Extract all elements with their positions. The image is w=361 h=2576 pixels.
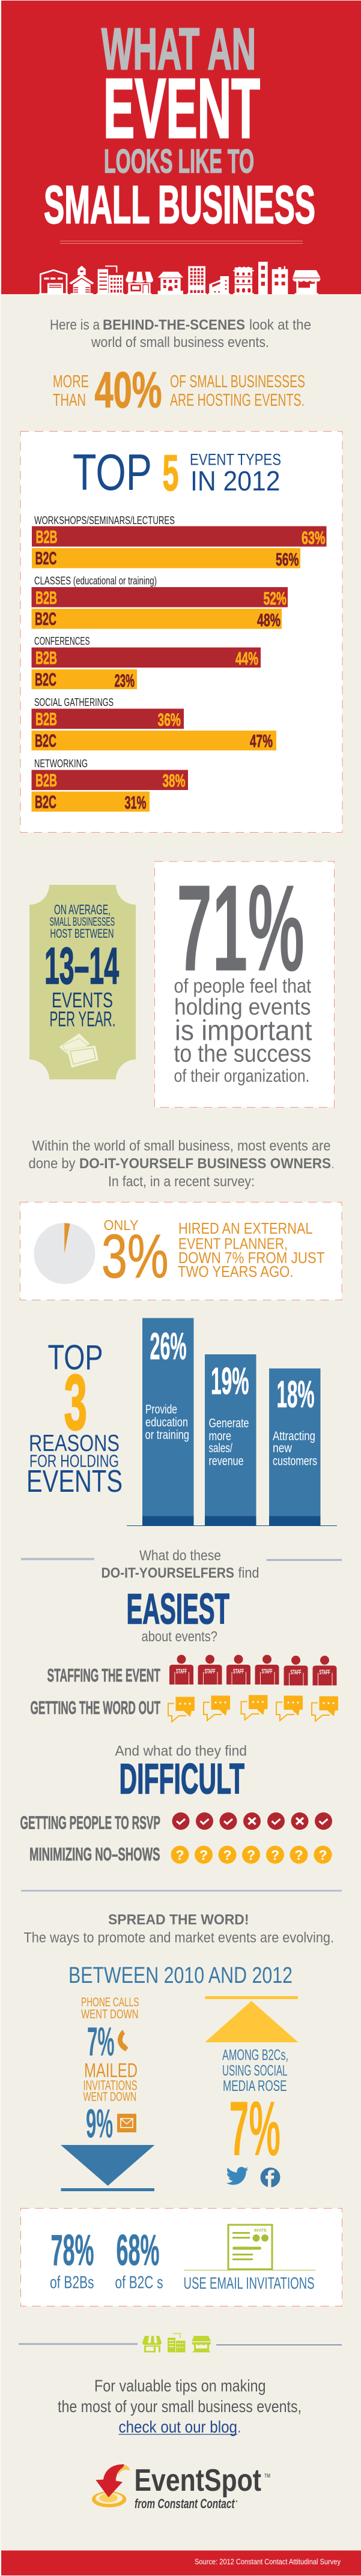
heading: what do they find difficult — [115, 1743, 247, 1803]
text block: do-it-yourself owners: done by — [29, 1156, 76, 1172]
logo: EventSpot: from Constant Contact — [135, 2496, 235, 2511]
bar group: networking: 31% — [125, 793, 147, 813]
column: phone and mail down: PHONE CALLS — [81, 1995, 139, 2009]
stat: more than 40%: 40% — [95, 361, 162, 418]
icon: schoolhouse — [69, 266, 94, 295]
bar: 26%: 26% — [150, 1326, 186, 1368]
panel: ticket, events per year: EVENTS — [52, 989, 113, 1012]
bar group: conferences: 44% — [235, 649, 258, 669]
panel: email invitations: 78% — [50, 2227, 94, 2275]
icon: staff person 3: STAFF — [233, 1668, 244, 1675]
icon: green office — [168, 2333, 185, 2352]
bar group: workshops: 56% — [276, 550, 299, 570]
text block: do-it-yourself owners: In fact, in a recent survey: — [108, 1174, 255, 1190]
column: phone and mail down: WENT DOWN — [81, 2007, 138, 2021]
arrow: down — [61, 2145, 155, 2191]
panel: only 3%: ONLY — [103, 1217, 138, 1234]
text block: do-it-yourself owners: Within the world of small business, most events are — [32, 1138, 330, 1154]
heading: top 3 reasons — [26, 1338, 123, 1499]
header banner — [1, 1, 361, 295]
bar: 18% — [269, 1369, 321, 1526]
icon: question 7: ? — [318, 1847, 327, 1863]
pie chart: 3% — [34, 1223, 95, 1284]
icon: tickets — [59, 1033, 99, 1068]
heading: top 5 event types in 2012: EVENT TYPES — [190, 450, 281, 468]
bar group: workshops: B2B — [36, 527, 58, 547]
logo: EventSpot: TM — [264, 2473, 270, 2479]
bar group: social gatherings: B2B — [35, 710, 57, 729]
heading: top 5 event types in 2012 — [73, 444, 281, 501]
bar: 19%: revenue — [209, 1454, 244, 1468]
bar group: classes: B2C — [35, 609, 56, 629]
icon: staff person 1: STAFF — [176, 1668, 187, 1675]
icon: staff person 5: STAFF — [291, 1669, 302, 1676]
icon: invitation card: INVITE — [254, 2228, 267, 2233]
bar group: networking — [31, 758, 188, 813]
text block: spread the word: The ways to promote and market events are evolving. — [24, 1929, 334, 1946]
icon: hotel — [233, 267, 254, 295]
row: staffing the event: STAFFING THE EVENT — [47, 1665, 160, 1686]
bar: 19%: sales/ — [209, 1441, 232, 1455]
row: staffing the event — [47, 1654, 336, 1686]
icon: warehouse — [39, 270, 68, 295]
column: phone and mail down: 9% — [86, 2101, 113, 2147]
text block: spread the word: SPREAD THE WORD! — [108, 1911, 249, 1928]
intro text — [50, 317, 311, 351]
icon: question 1 — [171, 1845, 189, 1863]
heading: top 3 reasons: REASONS — [29, 1431, 120, 1456]
heading: top 3 reasons: FOR HOLDING — [29, 1452, 119, 1471]
panel: email invitations: 68% — [117, 2227, 160, 2275]
icon: staff person 6 — [312, 1656, 336, 1686]
panel: ticket, events per year: ON AVERAGE, — [54, 902, 111, 917]
panel: ticket, events per year: SMALL BUSINESSES — [49, 915, 115, 929]
panel: 71%: to the success — [174, 1040, 311, 1067]
logo: EventSpot: EventSpot — [135, 2463, 261, 2498]
bar: 19%: Generate — [209, 1417, 249, 1430]
panel: only 3%: 3% — [102, 1222, 168, 1291]
icon: question 5 — [266, 1845, 284, 1863]
icon: staff person 4: STAFF — [262, 1668, 273, 1675]
icon: speech bubbles 2 — [204, 1695, 230, 1721]
icon: staff person 2 — [198, 1654, 222, 1685]
heading: top 5 event types in 2012: TOP — [73, 444, 152, 501]
intro text: Here is a — [50, 317, 100, 333]
icon: tower — [187, 266, 207, 295]
icon: office block — [97, 266, 124, 295]
heading: top 3 reasons: EVENTS — [26, 1464, 123, 1499]
bar group: social gatherings: 47% — [250, 731, 273, 752]
bar group: social gatherings: 36% — [157, 710, 181, 730]
icon: staff person 6: STAFF — [320, 1669, 330, 1676]
icon: question 3: ? — [223, 1847, 232, 1863]
bar: 18%: 18% — [276, 1374, 315, 1416]
icon: cross 1 — [243, 1812, 261, 1830]
bar group: networking: 38% — [162, 771, 185, 791]
bar: 26% — [142, 1318, 193, 1526]
panel: ticket, events per year: 13–14 — [44, 938, 119, 995]
icon: check 5 — [315, 1812, 332, 1830]
icon: check 1 — [172, 1812, 190, 1830]
heading: what do they find difficult: DIFFICULT — [119, 1755, 244, 1803]
stat: more than 40%: MORE — [53, 372, 89, 391]
heading: what do these do-it-yourselfers find easiest: EASIEST — [126, 1586, 229, 1633]
icon: market stall — [293, 270, 320, 295]
text block: do-it-yourself owners: DO-IT-YOURSELF BUSINESS OWNERS — [79, 1156, 331, 1172]
bar group: networking: NETWORKING — [34, 758, 88, 770]
icon: cross 2 — [291, 1812, 309, 1830]
icon: question 5: ? — [271, 1847, 279, 1863]
icon: question 7 — [314, 1845, 332, 1863]
icon: question 4: ? — [247, 1847, 255, 1863]
icon: speech bubbles 1 — [168, 1697, 195, 1722]
heading: between 2010 and 2012: BETWEEN 2010 AND 2012 — [68, 1963, 293, 1988]
bar group: social gatherings: SOCIAL GATHERINGS — [34, 696, 114, 708]
footer band with source: Source: 2012 Constant Contact Attitudinal Survey — [195, 2557, 341, 2566]
panel: 71%: of their organization. — [174, 1066, 310, 1086]
panel: 71%: is important — [175, 1015, 312, 1046]
bar: 18%: customers — [273, 1454, 317, 1468]
bar group: conferences: CONFERENCES — [34, 635, 90, 647]
bar group: classes: CLASSES (educational or training) — [34, 575, 157, 587]
heading: top 5 event types in 2012: 5 — [162, 444, 179, 501]
row: getting the word out — [30, 1695, 338, 1722]
bar group: workshops — [32, 514, 327, 570]
bar group: conferences: B2C — [35, 670, 56, 690]
column: social media up: MEDIA ROSE — [223, 2078, 287, 2095]
icon: question 4 — [242, 1845, 260, 1863]
column: social media up: AMONG B2Cs, — [222, 2047, 288, 2064]
icon: stamp envelope — [117, 2114, 136, 2132]
bar group: workshops: B2C — [35, 549, 56, 569]
bar: 18%: new — [273, 1441, 293, 1455]
bar group: workshops: 63% — [302, 528, 326, 548]
bar group: workshops: WORKSHOPS/SEMINARS/LECTURES — [34, 514, 175, 526]
panel: email invitations: of B2C s — [115, 2273, 163, 2292]
panel: 71%: holding events — [174, 995, 311, 1020]
icon: staff person 5 — [284, 1656, 308, 1686]
bar group: classes — [31, 575, 288, 630]
icon: apartment block — [272, 266, 288, 295]
column: phone and mail down: WENT DOWN — [83, 2090, 136, 2104]
icon: staff person 3 — [226, 1654, 250, 1685]
panel: only 3%: HIRED AN EXTERNAL — [178, 1219, 312, 1237]
intro text: look at the — [249, 317, 311, 333]
heading: top 5 event types in 2012: IN 2012 — [190, 465, 280, 496]
stat: more than 40%: THAN — [53, 391, 86, 410]
heading: top 3 reasons: TOP — [48, 1338, 103, 1377]
icon: house — [158, 272, 183, 295]
text block: do-it-yourself owners — [29, 1138, 334, 1190]
text block: tips and blog link: the most of your small business events, — [58, 2397, 302, 2416]
text block: tips and blog link: For valuable tips on making — [94, 2376, 265, 2395]
bar group: social gatherings — [31, 696, 276, 752]
icon: speech bubbles 5 — [312, 1697, 338, 1721]
panel: email invitations: of B2Bs — [50, 2273, 94, 2292]
panel: email invitations — [20, 2208, 342, 2306]
icons: row of buildings, right half — [187, 262, 320, 295]
panel: only 3% — [20, 1202, 342, 1300]
panel: only 3%: TWO YEARS AGO. — [178, 1262, 293, 1280]
heading: what do these do-it-yourselfers find easiest: DO-IT-YOURSELFERS — [101, 1565, 234, 1581]
icon: staff person 4 — [255, 1654, 279, 1685]
arrow: up — [205, 1996, 298, 2042]
column: social media up — [205, 1996, 298, 2188]
icons: row of buildings, left half — [39, 266, 183, 295]
intro text: world of small business events. — [91, 334, 269, 351]
bar: 26%: Provide — [145, 1402, 177, 1417]
icon: question 2: ? — [199, 1847, 208, 1863]
panel: top 5 event types — [20, 431, 342, 832]
heading: what do they find difficult: And what do they find — [115, 1743, 247, 1759]
panel: only 3%: DOWN 7% FROM JUST — [178, 1249, 325, 1267]
icon: invitation card — [228, 2225, 272, 2269]
icon: check 2 — [196, 1812, 213, 1830]
bar group: conferences — [31, 635, 261, 691]
stat: more than 40% — [53, 361, 305, 418]
icon: staff person 2: STAFF — [204, 1668, 216, 1675]
footer band with source — [1, 2550, 361, 2575]
icon: question 1: ? — [175, 1847, 184, 1863]
column: phone and mail down — [61, 1995, 155, 2191]
text block: tips and blog link: . — [238, 2418, 240, 2436]
row: getting the word out: GETTING THE WORD OUT — [30, 1697, 160, 1718]
row: getting people to rsvp: GETTING PEOPLE TO RSVP — [20, 1812, 160, 1833]
icon: phone — [118, 2030, 129, 2051]
row: minimizing no-shows: MINIMIZING NO–SHOWS — [29, 1844, 160, 1865]
logo: EventSpot — [92, 2463, 270, 2511]
icon: shop with awning — [126, 272, 153, 295]
intro text: BEHIND-THE-SCENES — [103, 317, 245, 333]
bar group: conferences: 23% — [114, 671, 135, 691]
title — [44, 16, 315, 234]
bar group: networking: B2C — [35, 792, 56, 812]
icon: question 2 — [195, 1845, 213, 1863]
bar group: networking: B2B — [35, 771, 57, 791]
bar: 26%: or training — [145, 1428, 189, 1442]
bar group: social gatherings: B2C — [35, 731, 56, 751]
bar: 19%: 19% — [211, 1360, 249, 1402]
text block: tips and blog link — [58, 2376, 302, 2436]
panel: 71% — [155, 860, 334, 1107]
bar: 19%: more — [209, 1429, 231, 1443]
icon: green stall — [192, 2336, 211, 2352]
title: LOOKS LIKE TO — [104, 142, 254, 180]
heading: what do these do-it-yourselfers find easiest: What do these — [139, 1548, 221, 1564]
bar group: classes: 52% — [263, 589, 287, 609]
icon: green shop — [142, 2336, 162, 2352]
bar group: classes: B2B — [35, 588, 57, 608]
panel: ticket, events per year — [29, 885, 136, 1079]
text block: do-it-yourself owners: . — [332, 1156, 334, 1172]
bar: 19% — [205, 1354, 256, 1526]
icon: check 3 — [220, 1812, 237, 1830]
bar chart: top 3 reasons — [127, 1318, 337, 1526]
column: phone and mail down: MAILED — [84, 2059, 138, 2081]
bar: 18%: Attracting — [273, 1429, 315, 1443]
icon: question 6: ? — [294, 1847, 303, 1863]
panel: ticket, events per year: PER YEAR. — [49, 1007, 115, 1031]
icon: twitter — [226, 2167, 248, 2185]
bar: 26%: education — [145, 1416, 188, 1429]
column: phone and mail down: INVITATIONS — [83, 2077, 137, 2093]
heading: what do these do-it-yourselfers find easiest: find — [238, 1565, 259, 1581]
heading: what do these do-it-yourselfers find easiest: about events? — [142, 1629, 217, 1645]
heading: what do these do-it-yourselfers find easiest — [101, 1548, 259, 1645]
text block: tips and blog link: check out our blog — [119, 2418, 237, 2436]
icon: speech bubbles 4 — [276, 1695, 303, 1721]
bar group: conferences: B2B — [35, 648, 57, 668]
icon: question 3 — [219, 1845, 237, 1863]
icon: question 6 — [290, 1845, 308, 1863]
heading: top 3 reasons: 3 — [64, 1358, 87, 1446]
icon: facebook — [261, 2167, 280, 2188]
icon: speech bubbles 3 — [241, 1695, 268, 1720]
icon: logo arrow — [92, 2464, 130, 2508]
panel: only 3%: EVENT PLANNER, — [178, 1234, 288, 1252]
column: social media up: USING SOCIAL — [222, 2063, 288, 2080]
icon: tall narrow building — [258, 262, 268, 295]
icon: staff person 1 — [169, 1654, 193, 1685]
icon: check 4 — [267, 1812, 285, 1830]
icon: stepped building — [208, 276, 230, 295]
column: social media up: 7% — [229, 2086, 281, 2172]
text block: spread the word — [24, 1911, 334, 1946]
column: phone and mail down: 7% — [87, 2019, 114, 2065]
panel: 71%: of people feel that — [174, 975, 311, 997]
panel: ticket, events per year: HOST BETWEEN — [50, 927, 114, 941]
bar group: classes: 48% — [257, 611, 281, 630]
